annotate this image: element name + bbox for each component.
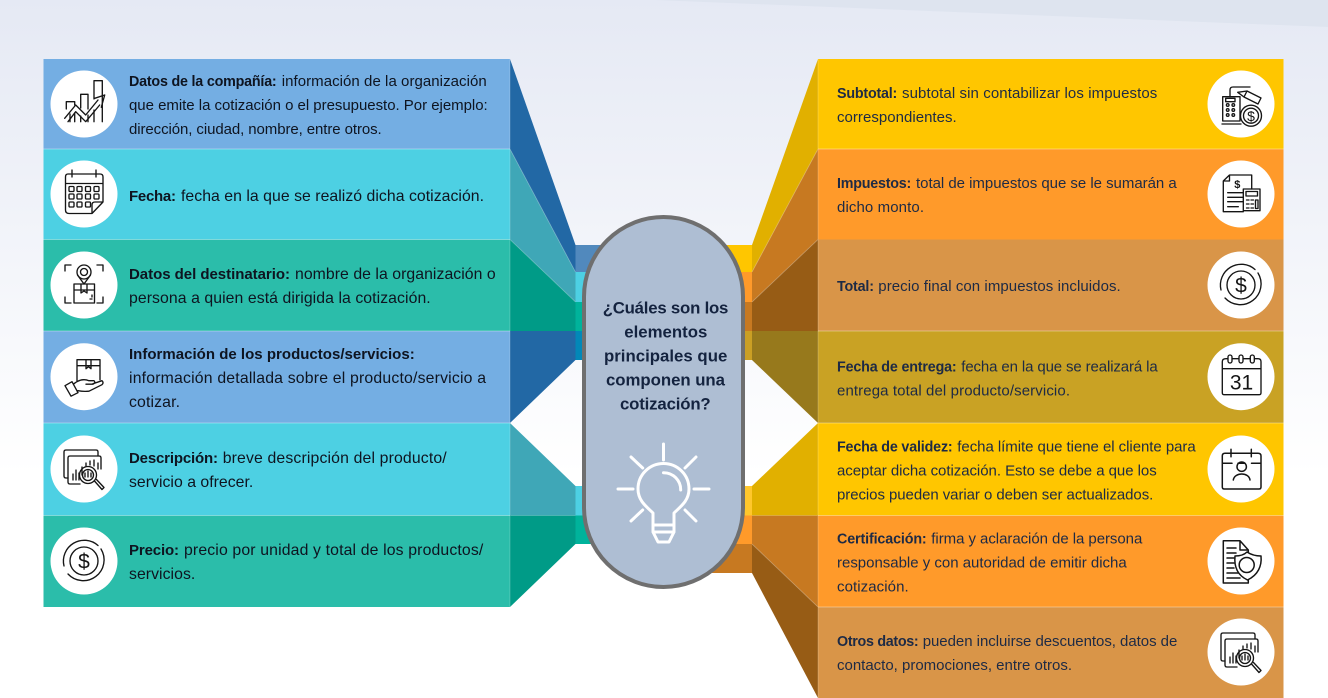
panel: Impuestos	[818, 149, 1284, 240]
central question: principales que	[604, 346, 727, 366]
icon: analytics magnifier	[1208, 618, 1274, 686]
text: precio final con impuestos incluidos.	[878, 278, 1121, 295]
text: Impuestos:	[837, 176, 911, 192]
text: Fecha de validez:	[837, 440, 953, 456]
icon: document shield	[1208, 528, 1274, 594]
text: Descripción:	[129, 450, 218, 467]
central question: ¿Cuáles son los	[603, 298, 728, 318]
text: fecha en la que se realizó dicha cotización.	[181, 188, 484, 205]
icon: dollar coin	[50, 528, 118, 594]
icon: dollar coin: $	[1235, 274, 1247, 298]
text: fecha límite que tiene el cliente para	[957, 438, 1196, 456]
panel: Subtotal	[818, 59, 1284, 149]
text: aceptar dicha cotización. Esto se debe a que los	[837, 462, 1157, 480]
panel: Total	[818, 240, 1284, 331]
text: precios pueden variar o deben ser actualizados.	[837, 486, 1153, 504]
text: Otros datos:	[837, 634, 919, 650]
text: firma y aclaración de la persona	[931, 530, 1143, 548]
text: información detallada sobre el producto/servicio a	[129, 370, 486, 387]
icon: calendar 31	[1208, 343, 1274, 410]
text: nombre de la organización o	[295, 266, 496, 283]
panel: Certificación	[818, 516, 1284, 607]
text: subtotal sin contabilizar los impuestos	[902, 85, 1157, 102]
icon: analytics magnifier	[50, 436, 118, 502]
text: Fecha de entrega:	[837, 360, 957, 376]
text: Datos de la compañía:	[129, 74, 277, 90]
panel: Precio	[44, 516, 510, 607]
text: fecha en la que se realizará la	[961, 358, 1158, 376]
icon: hand holding box	[50, 343, 118, 410]
icon: invoice and calculator: $	[1234, 179, 1240, 191]
panel: Información de los productos/servicios	[44, 331, 510, 423]
central question: elementos	[624, 322, 707, 342]
text: cotizar.	[129, 394, 180, 411]
text: Precio:	[129, 542, 179, 559]
text: pueden incluirse descuentos, datos de	[923, 633, 1177, 650]
text: servicios.	[129, 566, 195, 583]
icon: invoice and calculator	[1208, 160, 1274, 228]
panel: Descripción	[44, 423, 510, 516]
text: persona a quien está dirigida la cotización.	[129, 290, 431, 307]
center connector strips	[576, 245, 752, 573]
icon: location package	[50, 252, 118, 318]
text: Total:	[837, 279, 874, 295]
icon: dollar coin: $	[78, 550, 90, 574]
text: precio por unidad y total de los productos/	[184, 542, 484, 559]
text: cotización.	[837, 578, 909, 596]
icon: calculator and money: $	[1247, 108, 1255, 124]
text: dirección, ciudad, nombre, entre otros.	[129, 121, 382, 138]
text: información de la organización	[282, 73, 487, 90]
central question: componen una	[606, 370, 726, 390]
left folds	[510, 59, 576, 607]
text: total de impuestos que se le sumarán a	[916, 175, 1177, 192]
text: Información de los productos/servicios:	[129, 346, 415, 363]
icon: calculator and money	[1208, 70, 1274, 138]
text: responsable y con autoridad de emitir dicha	[837, 554, 1127, 572]
text: Datos del destinatario:	[129, 266, 290, 283]
icon: calendar	[50, 160, 118, 228]
panel: Fecha de validez	[818, 423, 1284, 516]
text: breve descripción del producto/	[223, 450, 447, 467]
panel: Datos del destinatario	[44, 240, 510, 331]
text: servicio a ofrecer.	[129, 474, 253, 491]
text: Subtotal:	[837, 86, 897, 102]
icon: dollar coin	[1208, 252, 1274, 318]
icon: calendar person	[1208, 436, 1274, 502]
panel: Fecha de entrega	[818, 331, 1284, 423]
text: que emite la cotización o el presupuesto. Por ejemplo:	[129, 97, 488, 114]
central question: cotización?	[620, 394, 711, 414]
text: dicho monto.	[837, 199, 924, 216]
icon: growth chart	[50, 70, 118, 138]
text: Fecha:	[129, 188, 176, 205]
text: Certificación:	[837, 532, 927, 548]
panel: Otros datos	[818, 607, 1284, 698]
central pill	[584, 217, 743, 587]
right folds	[752, 59, 818, 698]
icon: light bulb	[618, 444, 709, 542]
text: entrega total del producto/servicio.	[837, 382, 1070, 400]
text: correspondientes.	[837, 109, 957, 126]
text: contacto, promociones, entre otros.	[837, 657, 1072, 674]
panel: Fecha	[44, 149, 510, 240]
panel: Datos de la compañía	[44, 59, 510, 149]
icon: calendar 31: 31	[1230, 372, 1253, 395]
